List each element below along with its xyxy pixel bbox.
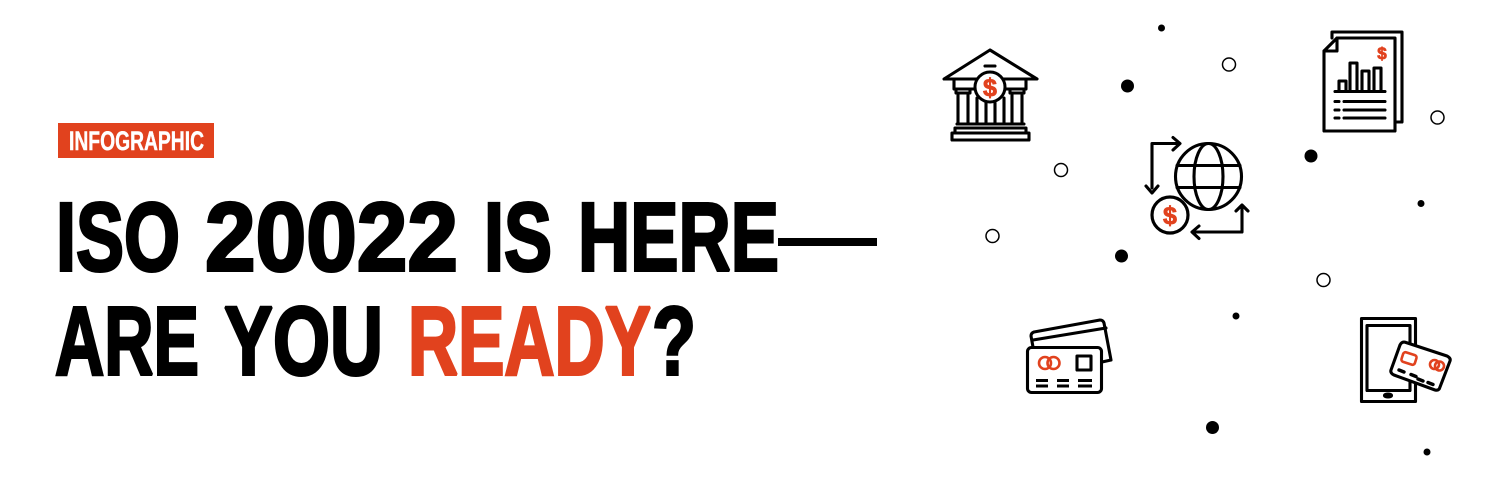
icon: tablet with card (1362, 318, 1450, 402)
decorative dots (986, 24, 1444, 456)
icon: bank (944, 50, 1037, 140)
title: YOU (224, 286, 383, 396)
title: HERE (578, 182, 779, 292)
bank coin: $ (983, 74, 997, 102)
title: ARE (55, 286, 199, 396)
title: 20022 (205, 182, 458, 292)
report dollar sign: $ (1377, 44, 1387, 63)
icon: financial report (1324, 32, 1402, 131)
icon: globe with currency exchange (1146, 138, 1248, 238)
icon: credit cards (1028, 320, 1111, 392)
title: IS (484, 182, 552, 292)
card logo (1039, 357, 1060, 369)
exchange coin: $ (1163, 202, 1177, 230)
tablet card logo and chip (1401, 352, 1444, 370)
arrow: outgoing (1146, 138, 1180, 193)
tag: infographic label (58, 123, 214, 158)
title (55, 182, 877, 396)
tag: infographic label: INFOGRAPHIC (69, 126, 204, 156)
title: READY (408, 286, 651, 396)
title: ISO (56, 182, 180, 292)
title: ? (652, 286, 696, 396)
arrow: incoming (1192, 205, 1248, 238)
